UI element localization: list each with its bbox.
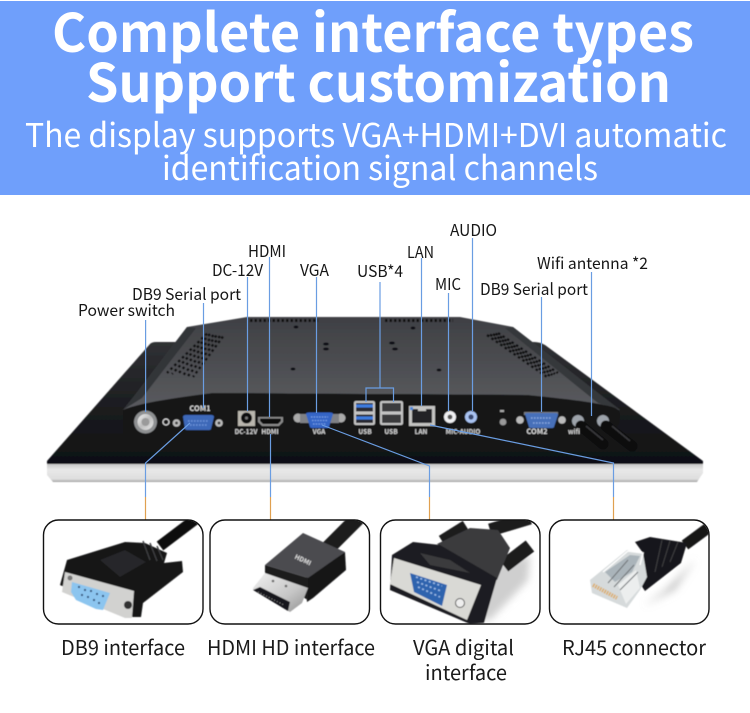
port captions: USB — [358, 426, 372, 436]
icon: HDMI plug — [253, 518, 358, 612]
port captions: MIC-AUDIO — [446, 426, 480, 436]
wifi antennas — [572, 415, 632, 446]
subtitle — [25, 109, 727, 190]
card captions: DB9 interface — [61, 631, 185, 661]
port labels: AUDIO — [450, 217, 497, 241]
COM2 port — [524, 412, 558, 428]
port labels: DB9 Serial port — [480, 276, 588, 300]
icon: RJ45 plug — [590, 525, 712, 608]
VGA port — [294, 412, 346, 428]
port captions — [189, 403, 580, 437]
DC-12V jack — [238, 411, 255, 426]
HDMI port — [258, 417, 283, 426]
port labels: VGA — [300, 257, 329, 281]
MIC jack — [444, 411, 456, 423]
USB ports grey — [380, 401, 403, 425]
port captions: LAN — [415, 426, 428, 436]
icon: VGA plug — [390, 518, 530, 624]
card: HDMI connector — [210, 518, 370, 624]
card: VGA connector — [380, 518, 540, 624]
subtitle: identification signal channels — [162, 142, 598, 190]
card captions: HDMI HD interface — [207, 631, 375, 661]
port labels: DB9 Serial port — [132, 281, 241, 305]
card: RJ45 connector — [550, 520, 712, 624]
LAN port — [409, 406, 435, 426]
callout lines — [146, 238, 614, 520]
card captions: RJ45 connector — [562, 631, 706, 661]
card captions: VGA digital — [413, 631, 514, 661]
port labels: Wifi antenna *2 — [537, 250, 648, 274]
port captions: DC-12V — [235, 426, 258, 436]
title — [52, 0, 694, 118]
port labels: Power switch — [78, 297, 175, 321]
card: DB9 connector — [44, 518, 203, 624]
subtitle: The display supports VGA+HDMI+DVI automatic — [25, 109, 727, 157]
port labels: DC-12V — [212, 257, 264, 281]
rear panel — [47, 342, 703, 464]
vents — [167, 333, 558, 377]
port captions: VGA — [312, 426, 326, 436]
AUDIO jack — [465, 411, 477, 423]
port captions: HDMI — [261, 426, 279, 436]
icon: DB9 cable — [60, 518, 197, 618]
port captions: COM1 — [189, 403, 211, 414]
card captions — [61, 631, 706, 686]
card captions: interface — [425, 656, 507, 686]
housing front face — [123, 393, 620, 434]
COM1 port — [183, 415, 214, 430]
header banner — [0, 0, 750, 195]
port captions: wifi — [568, 426, 580, 436]
port labels: LAN — [407, 239, 434, 263]
port labels: MIC — [435, 271, 461, 295]
power button — [134, 410, 157, 434]
port captions: USB — [384, 426, 398, 436]
housing top surface — [123, 317, 620, 410]
port labels: USB*4 — [357, 258, 403, 282]
monitor back view — [47, 317, 703, 482]
icon: HDMI plug: HDMI — [293, 551, 313, 567]
port labels — [78, 217, 648, 321]
title: Support customization — [86, 42, 671, 118]
silver front bezel — [47, 463, 703, 482]
port labels: HDMI — [248, 238, 286, 262]
USB ports blue — [354, 401, 375, 425]
port captions: COM2 — [526, 426, 548, 437]
